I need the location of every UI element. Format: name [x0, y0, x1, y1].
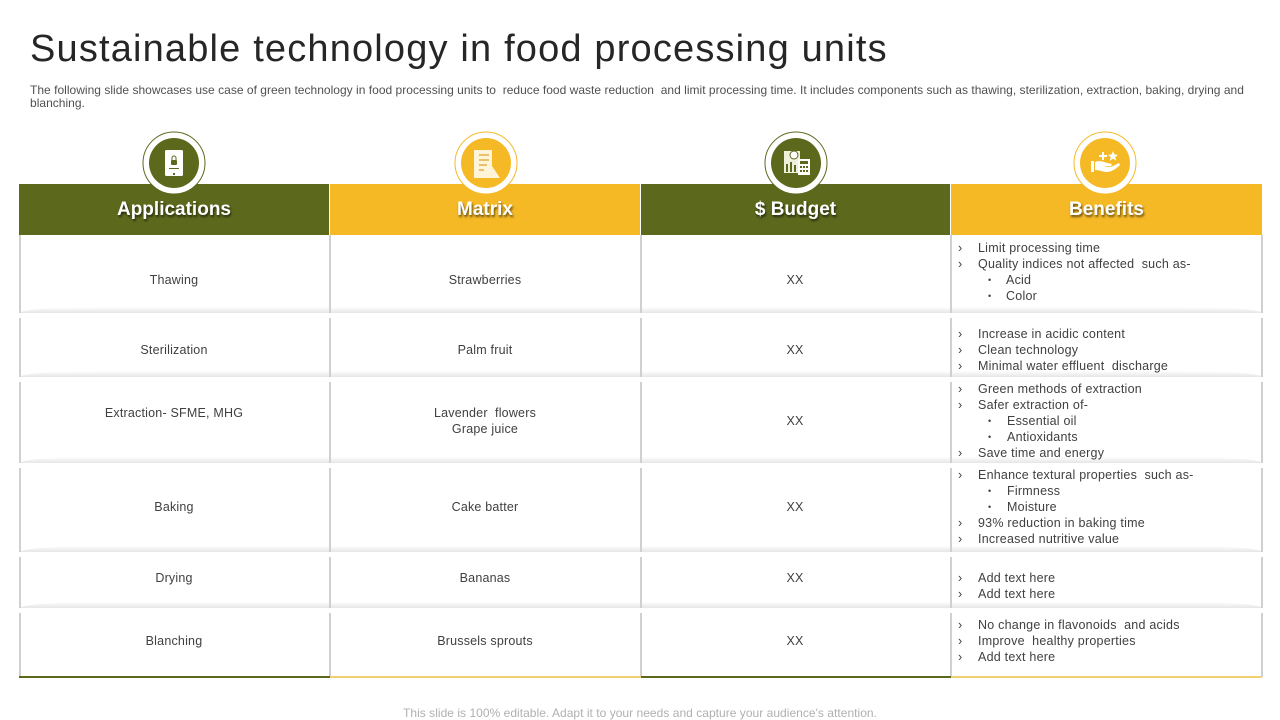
benefits: Baking: Firmness: [1007, 484, 1060, 498]
cell: Extraction: Extraction- SFME, MHG: [105, 406, 243, 420]
panel: table: [19, 184, 1262, 235]
benefits: Thawing: Quality indices not affected such as-: [978, 257, 1191, 271]
cell: Thawing: Thawing: [150, 273, 198, 287]
benefits: Blanching: No change in flavonoids and acids: [978, 618, 1180, 632]
cell: Blanching: Blanching: [146, 634, 202, 648]
benefits: Extraction: Antioxidants: [1007, 430, 1078, 444]
benefits: Extraction: Essential oil: [1007, 414, 1077, 428]
cell: budget row 1: XX: [786, 273, 804, 287]
cell: budget row 5: XX: [786, 571, 804, 585]
benefits: Thawing: Color: [1006, 289, 1037, 303]
icon: applications tablet lock: [142, 132, 206, 194]
cell: budget row 3: XX: [786, 414, 804, 428]
benefits: Thawing: Acid: [1006, 273, 1031, 287]
header: Benefits: [951, 184, 1262, 235]
icon: benefits hand with stars: [1074, 132, 1136, 194]
cell: Drying: Drying: [155, 571, 193, 585]
cell: Sterilization: Sterilization: [140, 343, 208, 357]
benefits: Extraction: Save time and energy: [978, 446, 1104, 460]
column: Applications: [105, 273, 243, 648]
column: Budget: [786, 273, 804, 648]
benefits: Blanching: Improve healthy properties: [978, 634, 1136, 648]
benefits: Sterilization: Increase in acidic content: [978, 327, 1125, 341]
cell: Lavender and grape: Grape juice: [452, 422, 518, 436]
benefits: Sterilization: Clean technology: [978, 343, 1078, 357]
benefits: Thawing: [958, 241, 1191, 303]
benefits: Blanching: [958, 618, 1180, 664]
benefits: Drying: Add text here: [978, 587, 1055, 601]
benefits: Drying: Add text here: [978, 571, 1055, 585]
header: Matrix: [330, 184, 640, 235]
benefits: Baking: Increased nutritive value: [978, 532, 1119, 546]
benefits: Baking: Moisture: [1007, 500, 1057, 514]
title: Sustainable technology in food processing units: [30, 28, 888, 70]
column: Matrix: [434, 273, 536, 648]
icon: matrix data sheet: [454, 132, 518, 194]
benefits: Drying: [958, 571, 1055, 601]
header: Budget: [641, 184, 950, 235]
icon: budget calculator and chart: [764, 132, 828, 194]
cell: Strawberries: Strawberries: [449, 273, 521, 287]
benefits: Baking: Enhance textural properties such as-: [978, 468, 1194, 482]
description text: The following slide showcases use case of green technology in food processing units to reduce food waste reduction and limit processing time. It includes components such as thawing, sterilization, extraction, baking, drying and blanching.: [30, 83, 1244, 110]
header: Applications: Applications: [117, 199, 231, 220]
header: Benefits: Benefits: [1069, 199, 1144, 220]
benefits: Extraction: Green methods of extraction: [978, 382, 1142, 396]
header: Budget: $ Budget: [755, 199, 836, 220]
benefits: Sterilization: [958, 327, 1168, 373]
cell: Cake batter: Cake batter: [452, 500, 518, 514]
cell: Palm fruit: Palm fruit: [458, 343, 512, 357]
cell: budget row 6: XX: [786, 634, 804, 648]
cell: budget row 4: XX: [786, 500, 804, 514]
benefits: Blanching: Add text here: [978, 650, 1055, 664]
cell: Baking: Baking: [154, 500, 194, 514]
cell: budget row 2: XX: [786, 343, 804, 357]
header: Applications: [19, 184, 329, 235]
benefits: Extraction: Safer extraction of-: [978, 398, 1088, 412]
cell: Lavender and grape: Lavender flowers: [434, 406, 536, 420]
header: Matrix: Matrix: [457, 199, 513, 220]
cell: Bananas: Bananas: [460, 571, 510, 585]
benefits: Baking: 93% reduction in baking time: [978, 516, 1145, 530]
benefits: Baking: [958, 468, 1194, 546]
footer note: This slide is 100% editable. Adapt it to your needs and capture your audience's attention.: [403, 706, 877, 720]
benefits: Sterilization: Minimal water effluent discharge: [978, 359, 1168, 373]
benefits: Thawing: Limit processing time: [978, 241, 1100, 255]
cell: Lavender and grape: [434, 406, 536, 436]
benefits: Extraction: [958, 382, 1142, 460]
cell: Brussels sprouts: Brussels sprouts: [437, 634, 533, 648]
